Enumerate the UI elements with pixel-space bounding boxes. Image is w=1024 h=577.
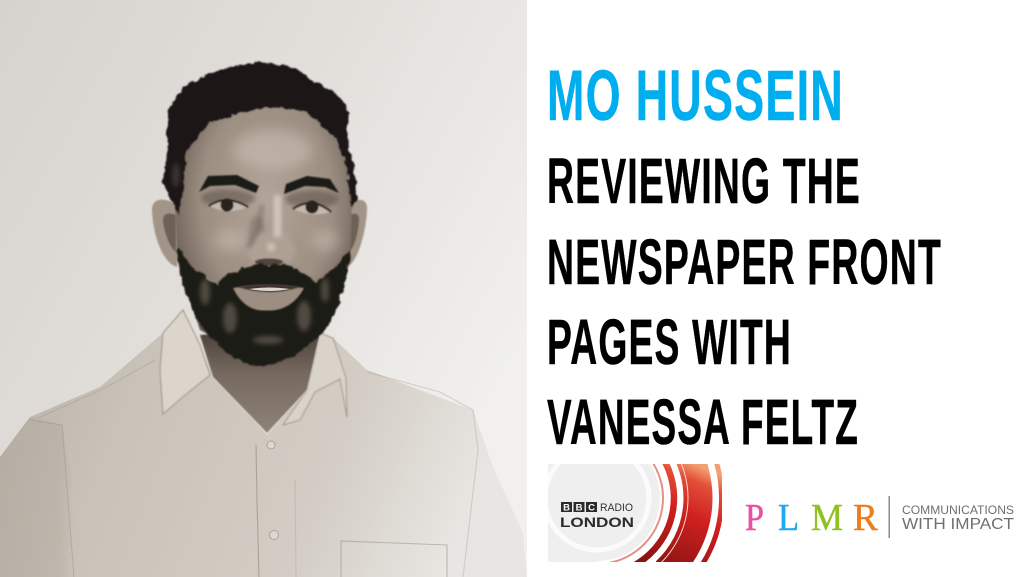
face: [175, 100, 352, 365]
headline: [547, 57, 942, 458]
left collar: [160, 310, 210, 414]
letter P: P: [745, 497, 764, 539]
BBC blocks: B: [576, 502, 583, 514]
beard grey flecks: [200, 278, 329, 344]
shirt seams, placket and pocket: [30, 360, 478, 577]
logo: PLMR: [745, 496, 1014, 539]
tagline: communications: COMMUNICATIONS: [902, 503, 1014, 517]
line: Pages with: PAGES WITH: [547, 306, 792, 378]
tagline: with impact: WITH IMPACT: [902, 516, 1014, 533]
temple grey: [172, 163, 180, 187]
eye socket shading: [201, 189, 339, 255]
BBC blocks: [561, 502, 597, 514]
neck: [200, 325, 325, 433]
logo: BBC Radio London: [548, 464, 722, 562]
Radio wordmark: RADIO: [600, 502, 633, 514]
ears: [152, 200, 367, 267]
beard and moustache: [177, 247, 350, 365]
face highlights: [214, 130, 339, 251]
eyes: [209, 198, 331, 214]
shirt sleeve shading: [0, 417, 74, 577]
BBC blocks: B: [563, 502, 570, 514]
BBC blocks: C: [588, 502, 595, 514]
London wordmark: LONDON: [560, 514, 634, 530]
mouth: [233, 284, 304, 325]
PLMR divider: [888, 496, 890, 538]
shirt body: [0, 310, 527, 577]
letter L: L: [778, 497, 799, 539]
nose: [246, 195, 296, 266]
logo rings: [545, 440, 722, 572]
eyebrows: [199, 175, 339, 194]
name: Mo Hussein: MO HUSSEIN: [547, 57, 844, 136]
hair: [163, 62, 358, 217]
right collar: [283, 333, 347, 425]
panel: portrait photo: [0, 0, 527, 577]
letter M: M: [811, 497, 843, 539]
letter R: R: [853, 497, 879, 539]
shirt buttons: [267, 441, 278, 540]
